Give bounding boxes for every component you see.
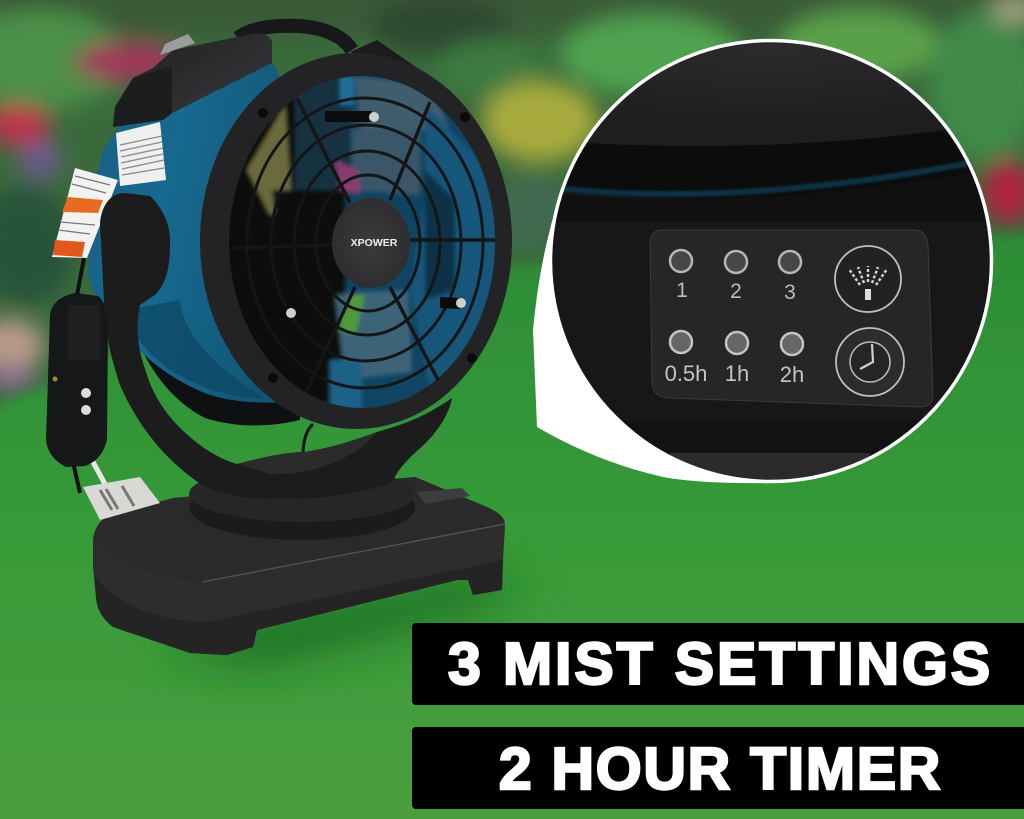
power cord with GFCI plug <box>46 258 108 493</box>
callout circle outline <box>550 40 992 482</box>
banner: 3 mist settings: 3 MIST SETTINGS <box>448 631 993 697</box>
blue seam <box>555 162 975 194</box>
timer labels: 1h <box>725 361 749 386</box>
mist level labels: 3 <box>784 281 796 304</box>
fan front ring <box>200 53 512 429</box>
interior: dark motor mount <box>229 98 298 384</box>
banner: 2 hour timer: 2 HOUR TIMER <box>499 736 942 802</box>
mist indicator lights <box>670 250 801 273</box>
mist level labels: 2 <box>730 280 742 303</box>
top handle <box>238 26 352 50</box>
banner: 2 hour timer <box>412 727 1024 809</box>
orange warning tag <box>52 168 118 258</box>
fan grill <box>232 98 495 390</box>
callout image area <box>552 42 990 480</box>
interior: blades and colored reflections <box>247 105 292 215</box>
rotating turntable <box>189 466 415 540</box>
top control housing <box>113 33 272 127</box>
cord tag <box>83 477 160 520</box>
fan hub with brand: XPOWER <box>351 237 398 249</box>
icon: timer button <box>836 328 904 396</box>
fan shadow on grass <box>150 575 530 668</box>
upper dome <box>614 42 929 122</box>
fan hub with brand <box>332 198 410 288</box>
fan base <box>93 477 505 655</box>
fan product <box>46 26 512 655</box>
yoke stand arm <box>100 193 452 499</box>
timer indicator lights <box>670 331 803 355</box>
power wire <box>303 424 313 452</box>
nozzles <box>265 111 460 319</box>
callout white backing with pointer <box>533 195 771 483</box>
timer labels: 0.5h <box>665 361 707 386</box>
blue housing <box>88 63 300 403</box>
ring top corner <box>350 40 452 92</box>
timer labels: 2h <box>780 362 804 387</box>
callout: zoomed control panel <box>533 30 1000 500</box>
mist level labels <box>678 282 795 299</box>
icon: mist button <box>835 246 901 312</box>
warning label on housing <box>116 122 166 186</box>
motor housing rear rim <box>135 320 300 426</box>
timer labels <box>666 365 803 382</box>
mist level labels: 1 <box>676 279 688 302</box>
control panel plate <box>650 230 933 407</box>
